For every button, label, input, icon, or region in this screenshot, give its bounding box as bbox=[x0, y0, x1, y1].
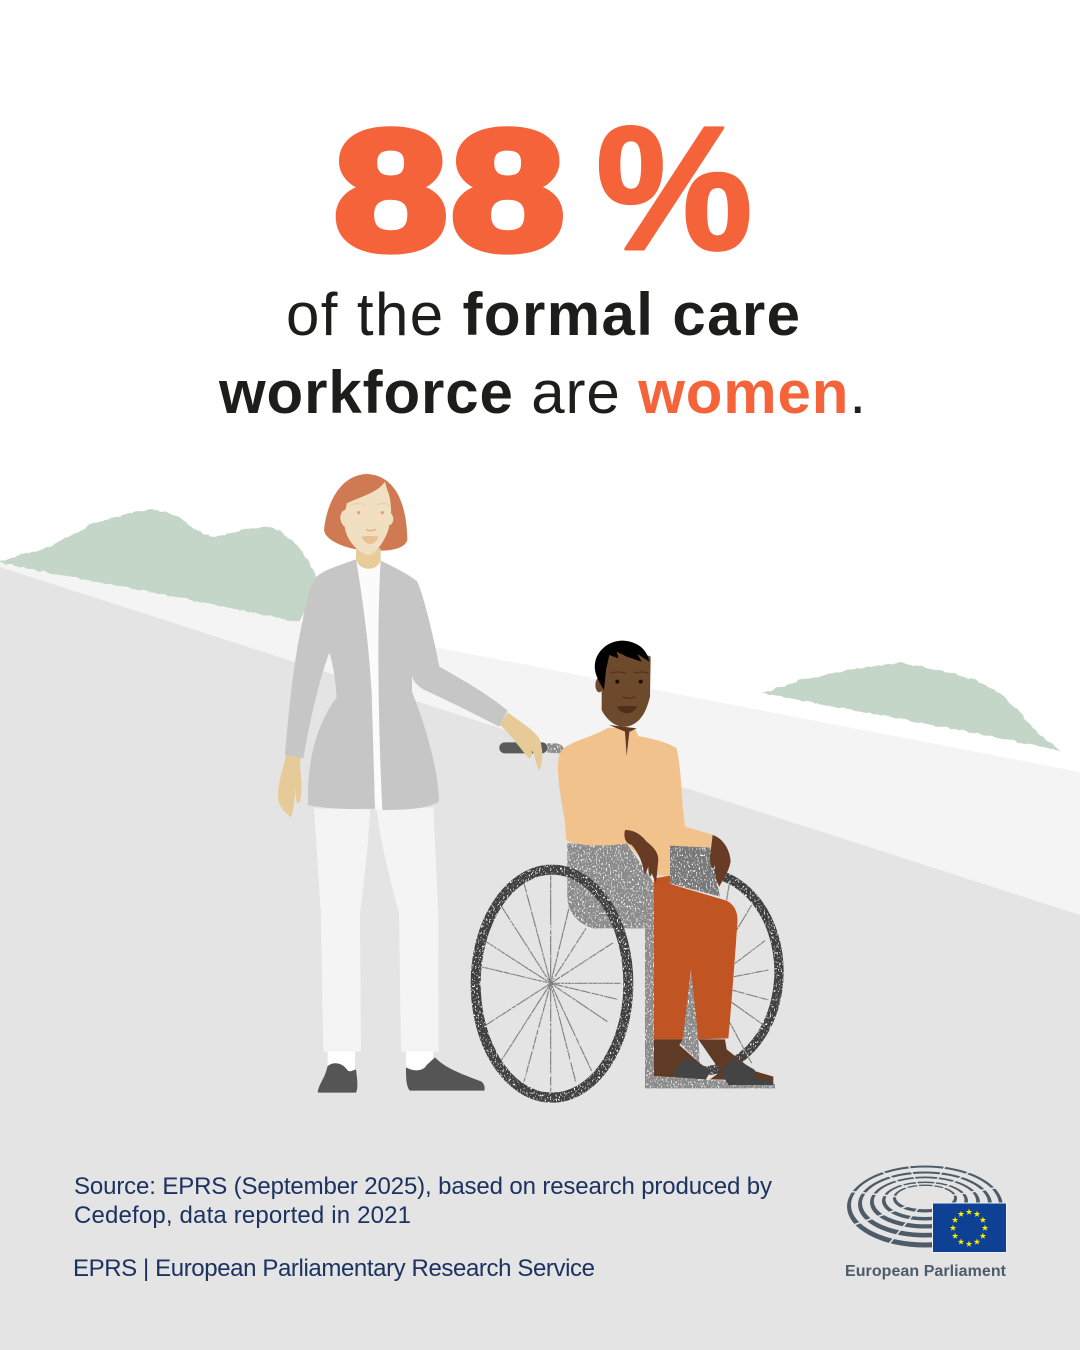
wheelchair push handle tube bbox=[547, 743, 564, 753]
background: grey ground bbox=[0, 567, 1080, 1350]
logo: European Parliament bbox=[838, 1158, 1012, 1280]
source text line 2: Cedefop, data reported in 2021 bbox=[74, 1202, 411, 1229]
background: light road band bbox=[0, 563, 1080, 915]
headline: 88 %: 8 bbox=[451, 95, 564, 285]
neck bbox=[356, 548, 381, 569]
logo hemicycle gaps bbox=[838, 1158, 1012, 1255]
man's hair bbox=[595, 641, 649, 690]
heading line 1: of the formal care bbox=[286, 281, 800, 348]
man's feet bbox=[654, 1039, 773, 1081]
armrest bbox=[670, 846, 720, 897]
hill: left bbox=[0, 509, 318, 622]
woman's socks and shoes bbox=[318, 1052, 485, 1093]
logo hemicycle bbox=[847, 1166, 1003, 1248]
headline: 88 % bbox=[334, 91, 752, 287]
source text line 1: Source: EPRS (September 2025), based on research produced by bbox=[74, 1173, 772, 1200]
heading line 2: workforce are women. bbox=[218, 359, 866, 426]
wheelchair frame bbox=[645, 928, 775, 1088]
jacket left bbox=[285, 559, 375, 809]
man's left hand bbox=[624, 830, 658, 883]
logo stars bbox=[950, 1209, 988, 1247]
logo flag bbox=[932, 1203, 1006, 1252]
hill: right bbox=[762, 663, 1060, 751]
face bbox=[340, 482, 393, 555]
man's shirt bbox=[558, 728, 713, 876]
hair bbox=[324, 474, 407, 551]
wheelchair seat bbox=[567, 843, 654, 928]
illustration: man in wheelchair bbox=[476, 641, 779, 1098]
man's ear bbox=[595, 678, 603, 692]
push handle grip bbox=[499, 742, 547, 753]
man's right hand bbox=[710, 835, 731, 887]
illustration: woman bbox=[278, 474, 547, 1093]
woman's upper body bbox=[278, 474, 547, 817]
back wheel bbox=[704, 868, 784, 1076]
left hand bbox=[278, 755, 301, 817]
man's face bbox=[602, 647, 651, 727]
headline: 88 %: % bbox=[596, 91, 752, 287]
front wheel bbox=[476, 870, 628, 1098]
man's trousers bbox=[654, 876, 738, 1039]
man's facial features bbox=[610, 672, 649, 713]
EPRS credit: EPRS | European Parliamentary Research Service bbox=[73, 1255, 595, 1282]
man's neck bbox=[609, 725, 637, 756]
right hand bbox=[500, 712, 542, 771]
headline: 88 %: 8 bbox=[334, 95, 447, 285]
sandals bbox=[673, 1058, 773, 1085]
white top bbox=[356, 560, 383, 810]
logo wordmark: European Parliament bbox=[845, 1263, 1007, 1280]
facial features bbox=[351, 503, 390, 544]
woman's trousers bbox=[314, 807, 439, 1052]
jacket right bbox=[378, 561, 508, 810]
